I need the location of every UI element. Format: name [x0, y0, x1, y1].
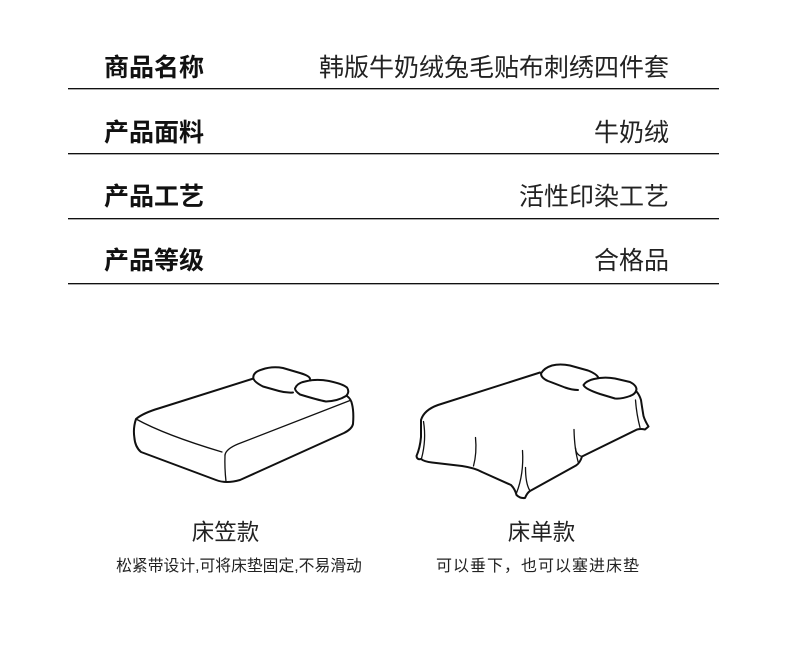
label: product name: 商品名称 — [104, 54, 204, 82]
row: grade — [68, 233, 719, 284]
row: craft — [68, 168, 719, 219]
value: product name: 韩版牛奶绒兔毛贴布刺绣四件套 — [319, 54, 669, 82]
caption title: flat sheet: 床单款 — [508, 520, 575, 545]
caption text: fitted sheet: 松紧带设计,可将床垫固定,不易滑动 — [116, 558, 362, 575]
value: craft: 活性印染工艺 — [519, 183, 669, 211]
row: fabric — [68, 103, 719, 154]
caption text: flat sheet: 可以垂下，也可以塞进床垫 — [436, 558, 640, 575]
label: grade: 产品等级 — [104, 247, 204, 275]
value: fabric: 牛奶绒 — [594, 119, 669, 147]
row: product name — [68, 38, 719, 89]
value: grade: 合格品 — [594, 247, 669, 275]
label: craft: 产品工艺 — [104, 183, 204, 211]
label: fabric: 产品面料 — [104, 119, 204, 147]
caption title: fitted sheet: 床笠款 — [192, 520, 259, 545]
